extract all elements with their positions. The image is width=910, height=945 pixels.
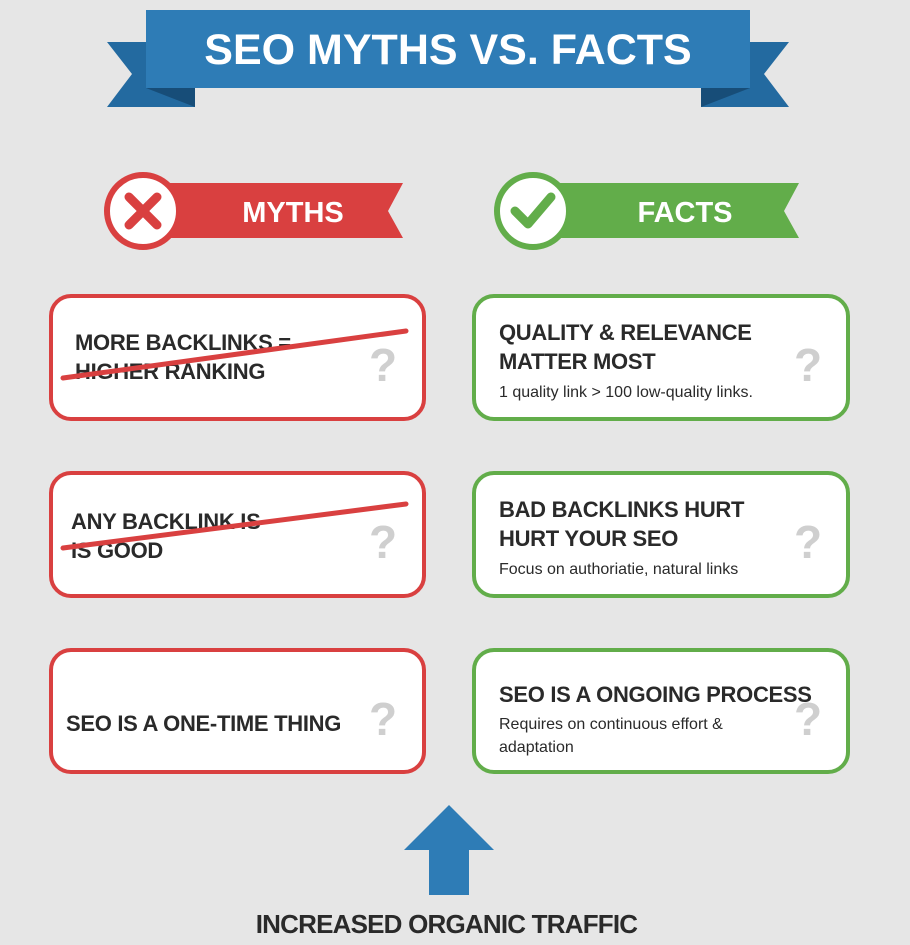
myth card 3 xyxy=(49,648,426,774)
facts badge: FACTS xyxy=(637,197,733,229)
fact card 1: ? xyxy=(794,339,822,391)
title banner xyxy=(107,10,789,107)
myth card 3: SEO IS A ONE-TIME THING xyxy=(66,711,341,736)
myth card 1: MORE BACKLINKS = xyxy=(75,330,291,355)
myth card 3: ? xyxy=(369,693,397,745)
fact card 3: adaptation xyxy=(499,739,574,756)
fact card 1 xyxy=(472,294,850,421)
myths badge: MYTHS xyxy=(242,197,344,229)
footer text: INCREASED ORGANIC TRAFFIC xyxy=(256,909,637,939)
myths badge xyxy=(104,172,403,250)
myth card 2 xyxy=(49,471,426,598)
facts badge xyxy=(494,172,799,250)
fact card 3: SEO IS A ONGOING PROCESS xyxy=(499,682,812,707)
fact card 2 xyxy=(472,471,850,598)
arrow up xyxy=(404,805,494,895)
myth card 2: ANY BACKLINK IS xyxy=(71,509,260,534)
title banner: SEO MYTHS VS. FACTS xyxy=(204,26,692,74)
fact card 1: QUALITY & RELEVANCE xyxy=(499,320,752,345)
fact card 3: ? xyxy=(794,693,822,745)
myth card 2: ? xyxy=(369,516,397,568)
fact card 2: BAD BACKLINKS HURT xyxy=(499,497,744,522)
myth card 1: ? xyxy=(369,339,397,391)
myth card 2: IS GOOD xyxy=(71,538,163,563)
fact card 2: HURT YOUR SEO xyxy=(499,526,678,551)
myth card 1: HIGHER RANKING xyxy=(75,359,265,384)
myth card 1 xyxy=(49,294,426,421)
fact card 1: MATTER MOST xyxy=(499,349,655,374)
fact card 2: ? xyxy=(794,516,822,568)
fact card 1: 1 quality link > 100 low-quality links. xyxy=(499,384,753,401)
fact card 3: Requires on continuous effort & xyxy=(499,716,723,733)
fact card 3 xyxy=(472,648,850,774)
fact card 2: Focus on authoriatie, natural links xyxy=(499,561,738,578)
